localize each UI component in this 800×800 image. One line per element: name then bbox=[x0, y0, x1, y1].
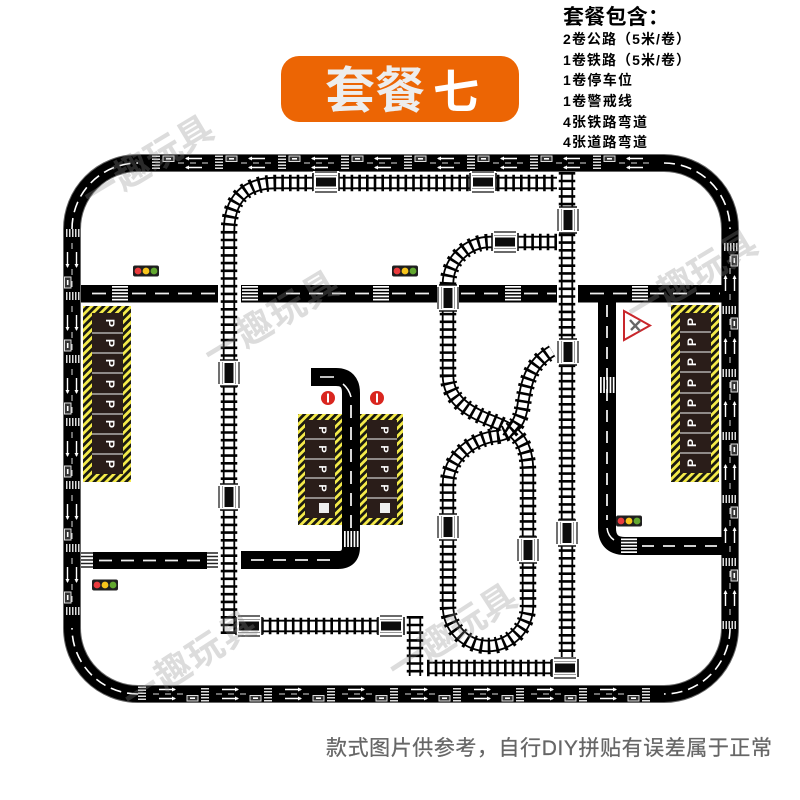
title badge bbox=[281, 56, 519, 122]
parking lot: left: P bbox=[103, 319, 117, 327]
title badge: 套餐 bbox=[325, 63, 425, 119]
package contents list: 1卷警戒线 bbox=[563, 93, 632, 109]
parking lot: right: P bbox=[685, 379, 699, 387]
lower cross road with bend bbox=[81, 377, 358, 569]
parking lot: left bbox=[83, 306, 131, 482]
railway joints bbox=[218, 171, 579, 679]
icon: traffic lights bbox=[92, 266, 642, 590]
package contents list: 4张道路弯道 bbox=[563, 134, 647, 150]
parking lot: right: P bbox=[685, 459, 699, 467]
parking lot: centre left: P bbox=[316, 445, 328, 453]
watermarks: 一趣玩具 bbox=[115, 603, 263, 719]
footer note: 款式图片供参考，自行DIY拼贴有误差属于正常 bbox=[326, 737, 772, 760]
parking lot: centre right: P bbox=[378, 445, 390, 453]
parking lot: centre left bbox=[298, 414, 342, 525]
railway: outer tracks bbox=[229, 172, 578, 676]
parking lot: left: P bbox=[103, 420, 117, 428]
parking lot: centre right: P bbox=[378, 465, 390, 473]
parking lot: centre right bbox=[360, 414, 403, 525]
watermarks bbox=[75, 107, 764, 719]
parking lot: left: P bbox=[103, 440, 117, 448]
parking lot: centre left: P bbox=[316, 484, 328, 492]
upper cross road bbox=[81, 285, 722, 302]
icon: no-parking signs bbox=[321, 391, 384, 405]
parking lot: right: P bbox=[685, 318, 699, 326]
parking lot: right: P bbox=[685, 439, 699, 447]
title badge: 七 bbox=[433, 66, 479, 118]
package contents list: 1卷铁路（5米/卷） bbox=[563, 52, 690, 68]
package contents list: 套餐包含： bbox=[563, 6, 669, 29]
railway: inner figure-eight track bbox=[448, 242, 557, 646]
parking lot: right: P bbox=[685, 419, 699, 427]
package contents list: 1卷停车位 bbox=[563, 72, 632, 88]
package contents list: 2卷公路（5米/卷） bbox=[563, 31, 690, 47]
outer ring road bbox=[64, 156, 738, 702]
parking lot: centre left: P bbox=[316, 465, 328, 473]
parking lot: centre right: P bbox=[378, 426, 390, 434]
parking lot: centre left: P bbox=[316, 426, 328, 434]
parking lot: left: P bbox=[103, 380, 117, 388]
right branch road bbox=[600, 297, 722, 553]
package contents list: 4张铁路弯道 bbox=[563, 114, 647, 130]
watermarks: 一趣玩具 bbox=[75, 107, 220, 217]
package contents list bbox=[563, 6, 690, 150]
parking lot: right: P bbox=[685, 358, 699, 366]
parking lot: right: P bbox=[685, 338, 699, 346]
parking lot: left: P bbox=[103, 359, 117, 367]
icon: triangular warning sign bbox=[624, 311, 650, 340]
parking lot: left: P bbox=[103, 460, 117, 468]
parking lot: right bbox=[671, 305, 719, 482]
watermarks: 一趣玩具 bbox=[380, 575, 524, 689]
parking lot: right: P bbox=[685, 399, 699, 407]
parking lot: left: P bbox=[103, 339, 117, 347]
watermarks: 一趣玩具 bbox=[196, 262, 346, 375]
watermarks: 一趣玩具 bbox=[619, 222, 764, 332]
parking lot: left: P bbox=[103, 400, 117, 408]
parking lot: centre right: P bbox=[378, 484, 390, 492]
